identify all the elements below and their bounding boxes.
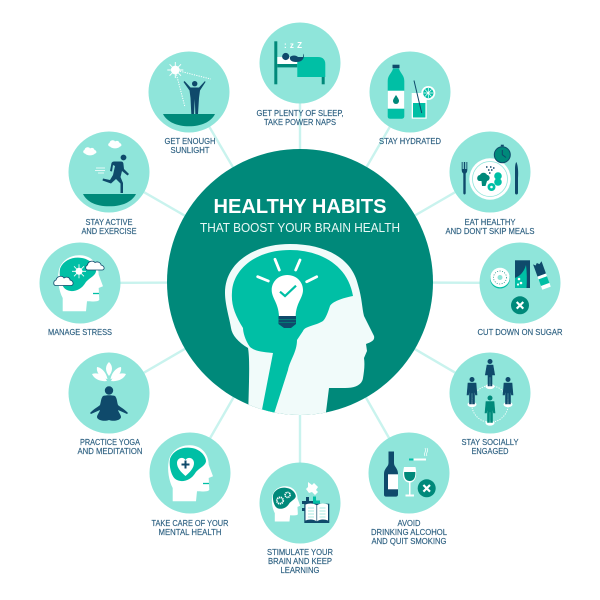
label: EAT HEALTHY [464,217,516,227]
label: CUT DOWN ON SUGAR [478,327,562,337]
label: GET ENOUGH [164,136,216,146]
panel: social [450,352,530,456]
label: AVOID [398,518,421,528]
panel: stimulate brain [260,462,340,575]
label: MENTAL HEALTH [158,527,222,537]
panel: eat healthy [446,132,535,236]
label: STAY ACTIVE [86,217,133,227]
icon: head with gears, puzzle and book [272,482,329,523]
label [446,217,535,236]
icon: plate, cutlery and clock [462,145,518,200]
subtitle: THAT BOOST YOUR BRAIN HEALTH [200,221,400,235]
panel: alcohol and smoking [368,432,450,546]
label: DRINKING ALCOHOL [371,527,447,537]
label: TAKE POWER NAPS [264,117,336,127]
label [371,518,447,546]
icon: meditating figure and lotus [90,362,128,421]
label [256,108,344,127]
icon: four people in a circle [467,359,513,426]
label [78,437,142,456]
icon: bottle, glass and cigarette [384,448,436,497]
icon: head with heart [168,445,213,501]
label [462,437,519,456]
label: STAY SOCIALLY [462,437,519,447]
icon: head with brain and light bulb [225,244,374,420]
icon: runner with clouds [83,140,136,206]
label: PRACTICE YOGA [80,437,140,447]
icon: bottle and glass [388,65,435,119]
label: STAY HYDRATED [379,136,441,146]
title: HEALTHY HABITS [214,195,386,218]
label: LEARNING [280,565,320,575]
panel: sugar [478,242,562,337]
label: MANAGE STRESS [48,327,112,337]
panel: sunlight [148,52,230,155]
label: AND DON'T SKIP MEALS [446,226,535,236]
label: STIMULATE YOUR [267,547,333,557]
label: TAKE CARE OF YOUR [152,518,228,528]
panel: yoga [68,352,150,456]
panel: stress [40,242,120,337]
icon: head with clouds and sun [54,255,104,311]
label [267,547,333,575]
icon: person in the sun [163,62,215,126]
icon: sweets with cross [490,260,551,314]
label: ENGAGED [472,446,509,456]
label [152,518,228,537]
panel: hydrated [370,52,450,146]
label [164,136,216,155]
label: BRAIN AND KEEP [268,556,332,566]
label: AND QUIT SMOKING [372,536,446,546]
panel: sleep [256,22,344,127]
icon: bed: : z Z [284,41,302,50]
label: SUNLIGHT [170,145,210,155]
label: AND EXERCISE [82,226,137,236]
label: AND MEDITATION [78,446,142,456]
connector lines [80,63,520,503]
label [82,217,137,236]
panel: mental health [150,432,230,537]
panel: central circle [167,149,433,420]
label: GET PLENTY OF SLEEP, [256,108,344,118]
panel: active [68,132,150,236]
